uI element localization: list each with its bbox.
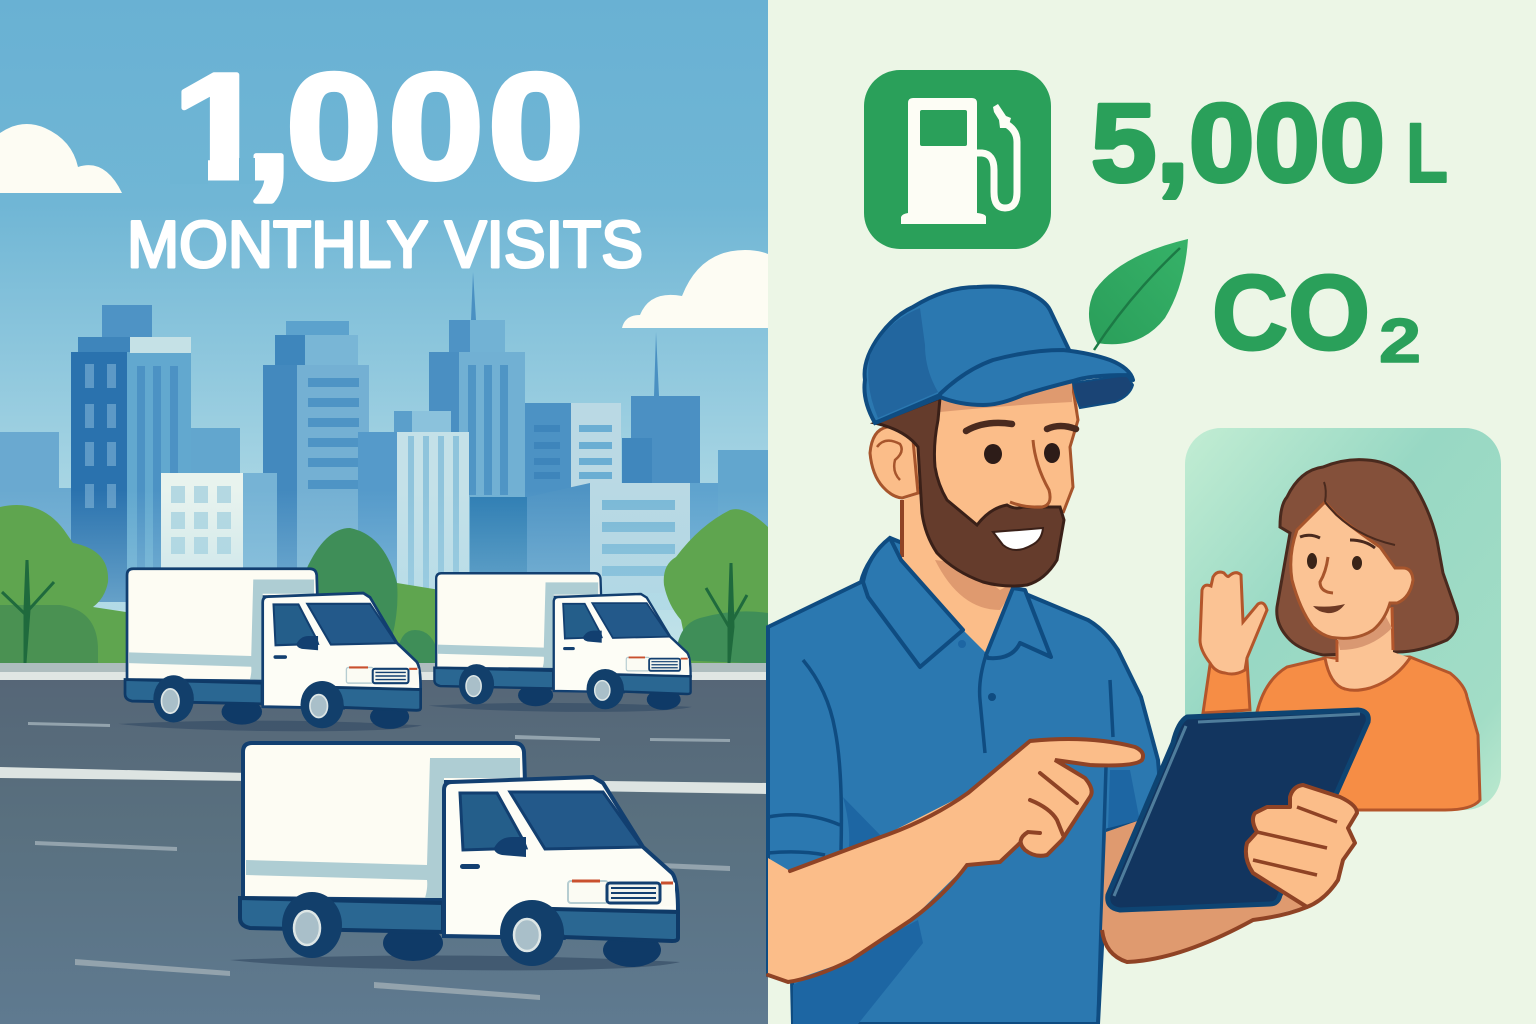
fuel figure: L <box>1406 106 1448 200</box>
man: shirt and torso <box>768 538 1162 1024</box>
truck: front <box>230 743 680 970</box>
cloud left <box>0 124 122 193</box>
CO2 label: CO <box>1212 254 1370 372</box>
big number: 1,000 <box>172 43 584 210</box>
man: holding fingers <box>1246 785 1357 907</box>
skyline <box>0 272 768 672</box>
man: ear <box>870 427 918 498</box>
subtitle: MONTHLY VISITS <box>127 207 643 281</box>
icon: fuel pump <box>864 70 1051 249</box>
man: supporting arm <box>1102 820 1310 962</box>
fuel figure: 5,000 <box>1091 82 1385 205</box>
woman: neck <box>1325 607 1410 690</box>
road <box>0 663 768 1024</box>
woman: raised arm <box>1203 660 1250 713</box>
man: neck <box>902 480 1025 653</box>
man: collar <box>863 538 1051 667</box>
woman: face <box>1291 502 1413 638</box>
man: beard <box>875 398 1064 586</box>
man: head <box>870 375 1078 590</box>
icon: leaf <box>1089 239 1188 350</box>
truck: back right <box>429 573 692 712</box>
trees right <box>664 509 768 664</box>
woman: hair <box>1277 460 1458 655</box>
panel: right background <box>768 0 1536 1024</box>
truck: back left <box>118 569 422 731</box>
trees middle <box>300 528 440 664</box>
panel: customer video call <box>1185 428 1501 810</box>
CO2 label: 2 <box>1379 307 1421 376</box>
man: forearm and pointing hand <box>768 739 1143 982</box>
man: cap <box>864 287 1133 423</box>
woman: waving hand <box>1200 572 1267 674</box>
cloud right <box>622 250 768 328</box>
panel: city scene <box>0 0 768 1024</box>
tablet <box>1108 710 1368 910</box>
woman: body <box>1240 657 1480 810</box>
trees left <box>0 505 126 664</box>
